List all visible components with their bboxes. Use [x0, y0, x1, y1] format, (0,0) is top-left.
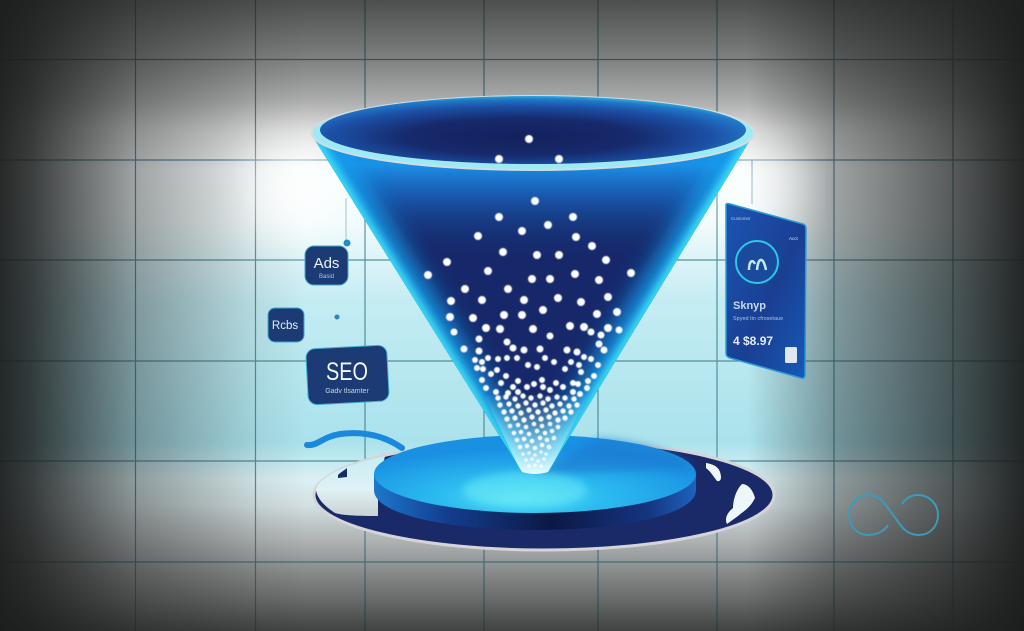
- label: SEO: [306, 345, 389, 405]
- disk top: [374, 435, 696, 513]
- product card: Acct: [789, 236, 799, 241]
- disk side: [374, 474, 696, 530]
- label: Ads: Ads: [314, 255, 339, 272]
- label: SEO: SEO: [326, 358, 368, 386]
- blue cable: [307, 433, 402, 448]
- card icon: [736, 241, 778, 283]
- product card: [726, 204, 806, 378]
- base platform: [307, 433, 774, 550]
- funnel interior: [320, 96, 746, 164]
- product card: Customer: [731, 216, 751, 221]
- product card: Sknyp: [733, 300, 766, 312]
- label: SEO: Gadv tlsamter: [325, 388, 369, 395]
- falling particles: [428, 139, 631, 466]
- label: Ribs: Rcbs: [272, 320, 298, 332]
- small marker dot: [334, 314, 340, 320]
- label: Ads: Basid: [319, 274, 334, 280]
- outer dark ring: [314, 440, 774, 550]
- funnel cone body: [315, 140, 749, 474]
- label: Ribs: [268, 308, 304, 342]
- product card: 4 $8.97: [733, 334, 773, 348]
- label: Ads: [305, 198, 350, 285]
- product card: Spyed tin cfrosetaue: [733, 316, 783, 322]
- funnel rim: [312, 96, 754, 170]
- funnel: [300, 96, 770, 480]
- infinity icon: [849, 495, 938, 535]
